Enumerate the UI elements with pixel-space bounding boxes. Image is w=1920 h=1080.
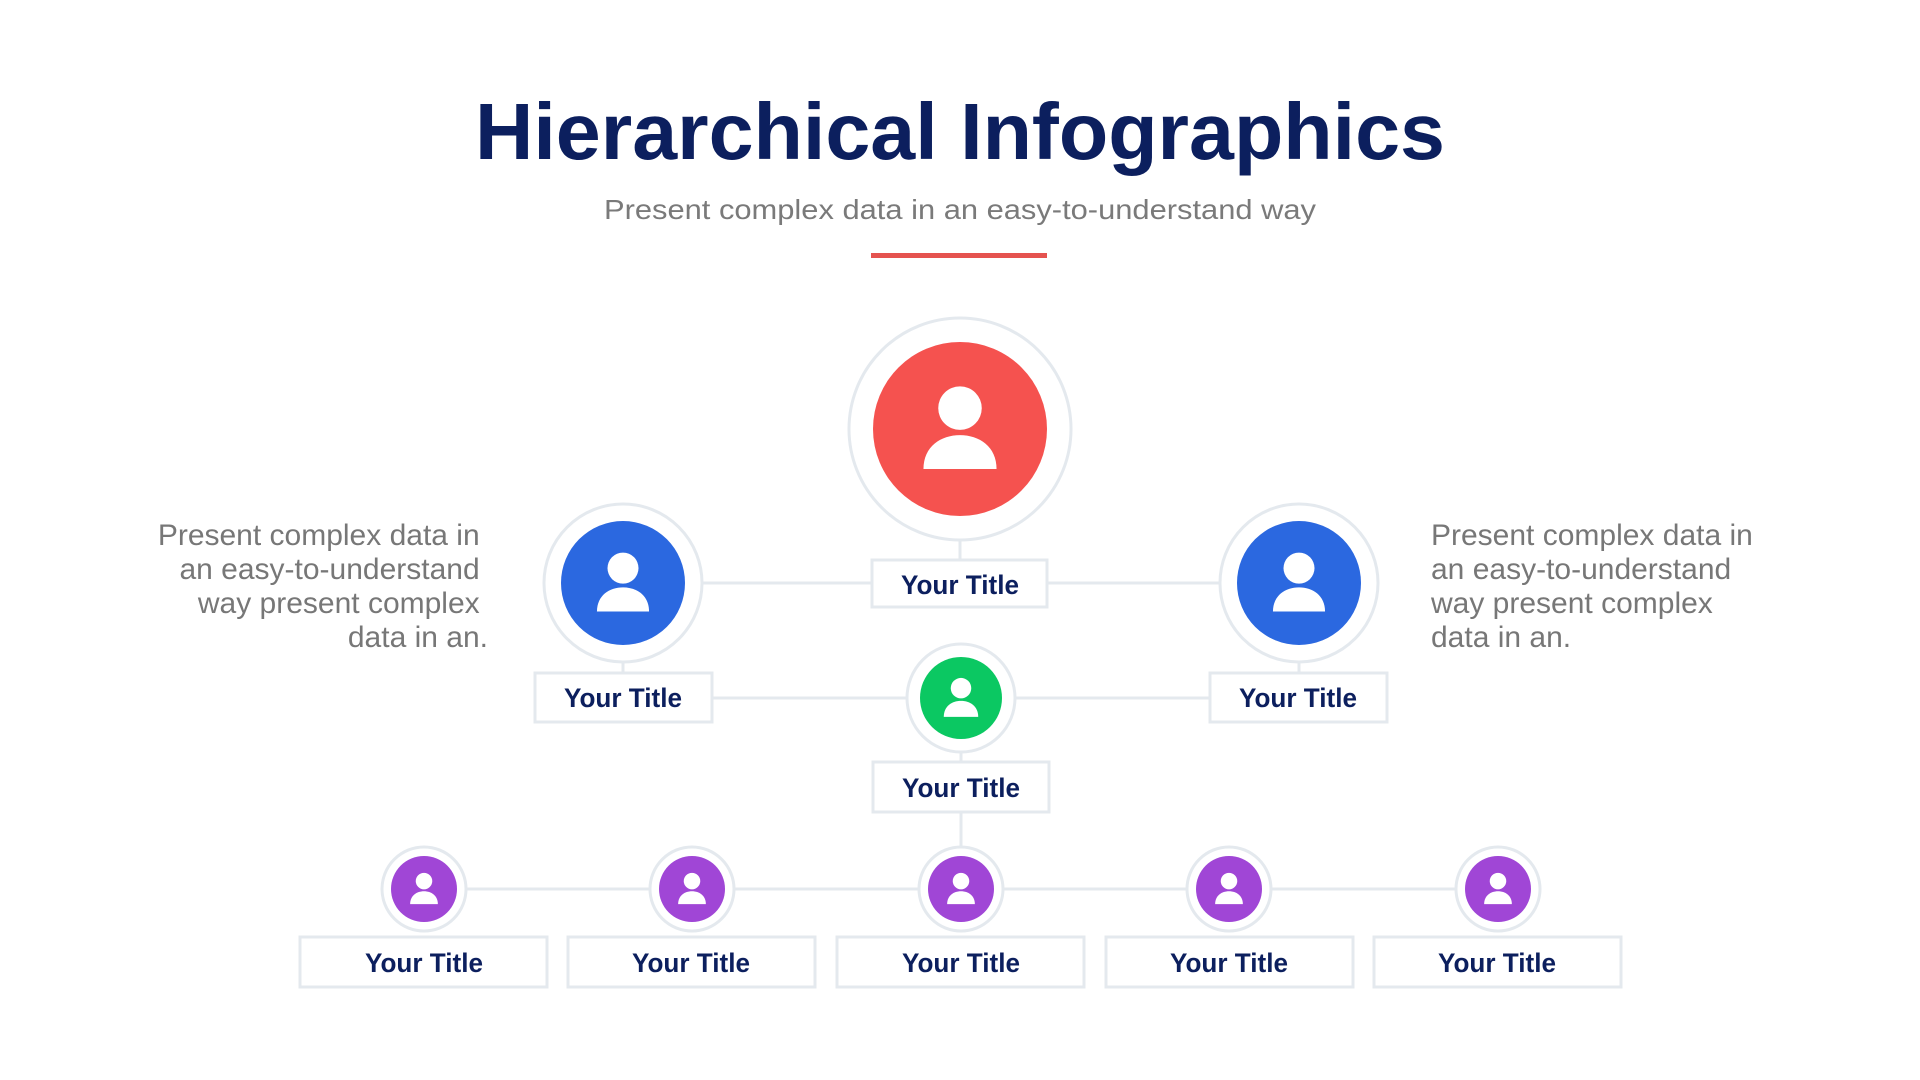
- node: purple 4: [1187, 847, 1271, 931]
- box: top title: Your Title: [901, 570, 1019, 600]
- box: purple 3 title: Your Title: [902, 948, 1020, 978]
- box: purple 5 title: [1374, 937, 1621, 987]
- title: Hierarchical Infographics: [475, 87, 1445, 176]
- text block: right description: data in an.: [1431, 621, 1571, 654]
- box: purple 2 title: [568, 937, 815, 987]
- node: purple 3: [919, 847, 1003, 931]
- box: green title: [873, 762, 1049, 812]
- text block: left description: an easy-to-understand: [179, 553, 480, 586]
- box: blue left title: [535, 673, 712, 722]
- box: purple 5 title: Your Title: [1438, 948, 1556, 978]
- box: purple 4 title: Your Title: [1170, 948, 1288, 978]
- text block: right description: Present complex data in: [1431, 519, 1753, 552]
- subtitle: Present complex data in an easy-to-understand way: [604, 194, 1316, 225]
- node: blue left: [544, 504, 702, 662]
- text block: left description: way present complex: [197, 587, 480, 620]
- node: purple 2: [650, 847, 734, 931]
- box: top title: [872, 560, 1047, 607]
- accent underline: [871, 253, 1047, 258]
- node: green: [907, 644, 1015, 752]
- text block: left description: data in an.: [348, 621, 488, 654]
- node: purple 1: [382, 847, 466, 931]
- box: blue right title: Your Title: [1239, 683, 1357, 713]
- box: purple 1 title: Your Title: [365, 948, 483, 978]
- text block: left description: Present complex data in: [158, 519, 480, 552]
- box: blue left title: Your Title: [564, 683, 682, 713]
- text block: right description: way present complex: [1430, 587, 1713, 620]
- box: purple 4 title: [1106, 937, 1353, 987]
- box: green title: Your Title: [902, 773, 1020, 803]
- node: blue right: [1220, 504, 1378, 662]
- node: purple 5: [1456, 847, 1540, 931]
- box: purple 2 title: Your Title: [632, 948, 750, 978]
- text block: right description: an easy-to-understand: [1431, 553, 1731, 586]
- box: purple 1 title: [300, 937, 547, 987]
- box: purple 3 title: [837, 937, 1084, 987]
- box: blue right title: [1210, 673, 1387, 722]
- node: top red: [849, 318, 1071, 540]
